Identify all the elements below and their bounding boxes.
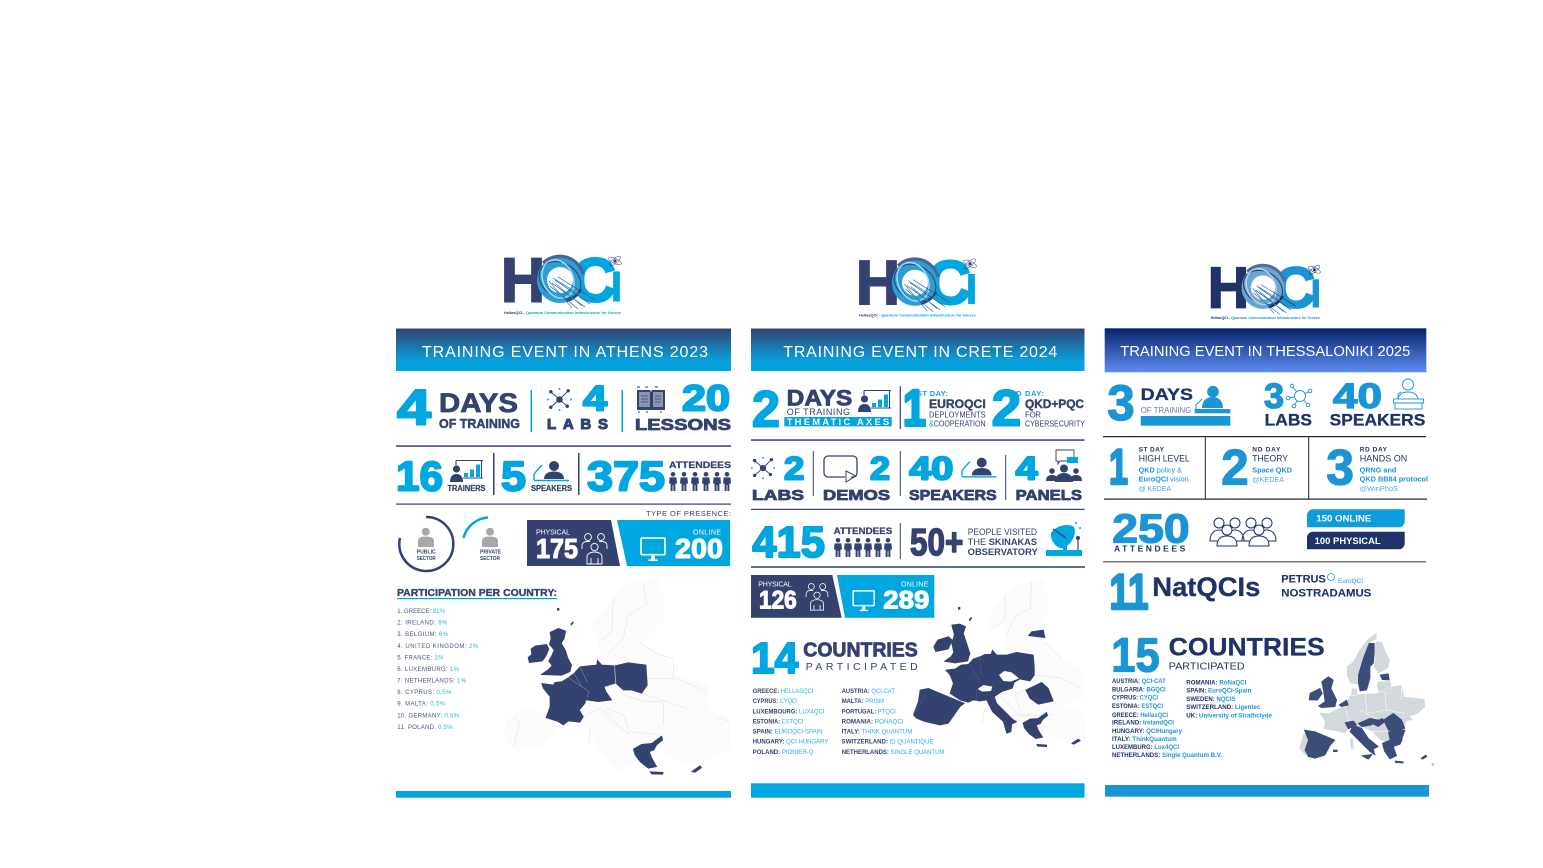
- cell: 1st day: ST DAY: [1139, 447, 1165, 454]
- list: participation by country: 10. GERMANY: 0,5%: [397, 713, 460, 719]
- stat: 4 panels: PANELS: [1016, 488, 1082, 504]
- stat: 2 labs: [751, 450, 804, 504]
- stat: 4 days of training: DAYS: [439, 388, 518, 418]
- stat: 16 trainers: TRAINERS: [448, 484, 486, 493]
- chart: private sector: [463, 517, 517, 571]
- cell: 3rd day: RD DAY: [1360, 447, 1388, 454]
- stat: 2 labs: LABS: [752, 488, 804, 504]
- cell: 1st day: 1: [1109, 439, 1128, 495]
- list: participation by country: 2. IRELAND: 6%: [397, 620, 448, 626]
- box: physical 175: PHYSICAL: [536, 530, 570, 536]
- icon: panel discussion: [1046, 450, 1082, 482]
- list: participating countries, right: MALTA: PRISM: [842, 699, 884, 705]
- stat: 2nd day QKD+PQC: CYBERSECURITY: [1025, 419, 1086, 428]
- stat: 2 days of training: DAYS: [787, 386, 852, 411]
- list: participating countries, right: SWITZERLAND: Ligentec: [1186, 705, 1261, 711]
- cell: 2nd day: [1221, 439, 1292, 495]
- text: Petrus and Nostradamus: PETRUS: [1281, 573, 1326, 585]
- footer bar: [751, 783, 1084, 798]
- list: participation by country: 1. GREECE: 81%: [397, 609, 446, 615]
- list: participating countries, left: GREECE: HellasQCI: [1112, 713, 1168, 719]
- cell: 1st day: QKD policy &: [1139, 467, 1182, 474]
- heading: 14 countries participated: PARTICIPATED: [806, 661, 918, 673]
- stat: 11 NatQCIs: 11: [1110, 564, 1148, 620]
- list: participating countries, left: LUXEMBURG: Lux4QCI: [1112, 745, 1179, 751]
- stat: 40 speakers: [1330, 377, 1425, 430]
- logo: HQCI: C: [927, 249, 971, 318]
- stat: 16 trainers: 16: [396, 452, 443, 500]
- stat: 375 attendees: 375: [587, 452, 665, 500]
- cell: 1st day: HIGH LEVEL: [1139, 454, 1190, 464]
- list: participating countries, left: HUNGARY: QCI HUNGARY: [753, 740, 828, 746]
- list: participating countries, left: [1112, 679, 1222, 759]
- badge: 100 physical: 100 PHYSICAL: [1315, 536, 1381, 546]
- heading: 15 countries participated: PARTICIPATED: [1169, 660, 1245, 672]
- list: participating countries, right: AUSTRIA: QCI-CAT: [842, 689, 895, 695]
- heading: 14 countries participated: [751, 634, 918, 683]
- stat: 50+ visited observatory: [910, 522, 1082, 564]
- list: participating countries, left: HUNGARY: QCIHungary: [1112, 729, 1183, 735]
- list: participating countries, right: NETHERLANDS: SINGLE QUANTUM: [842, 750, 944, 756]
- map: Europe, Crete participants: [913, 580, 1085, 747]
- list: participating countries, left: GREECE: HELLASQCI: [753, 689, 814, 695]
- logo: HQCI: HellasQCI - Quantum Communication Infrastructure for Greece: [504, 311, 621, 315]
- icon: demo screen: [824, 456, 857, 482]
- box: physical 126: [751, 575, 842, 618]
- schedule table lines: [1103, 436, 1427, 500]
- list: participating countries, left: BULGARIA: BGQCI: [1112, 687, 1166, 693]
- list: participation by country: 9. MALTA: 0,5%: [397, 702, 446, 708]
- logo: HQCI: [856, 249, 978, 318]
- stat: 2nd day QKD+PQC: QKD+PQC: [1025, 399, 1084, 411]
- logo: HQCI: HellasQCI - Quantum Communication Infrastructure for Greece: [859, 314, 976, 318]
- logo: HQCI: [501, 246, 623, 316]
- stat: 2 days of training: OF TRAINING: [787, 407, 850, 417]
- stat: 40 speakers: [909, 450, 997, 504]
- stat: 11 NatQCIs: NatQCIs: [1152, 572, 1260, 602]
- list: participating countries, left: IRELAND: IrelandQCI: [1112, 721, 1174, 727]
- stat: 4 panels: [1016, 450, 1082, 504]
- stat: 2 demos: DEMOS: [823, 488, 890, 504]
- heading: 14 countries participated: 14: [751, 634, 799, 683]
- panel: Thessaloniki 2025: [1103, 257, 1434, 797]
- stat: 4 days of training: OF TRAINING: [439, 416, 520, 431]
- stat: 2 demos: [823, 450, 890, 504]
- list: participating countries, left: ITALY: ThinkQuantum: [1112, 737, 1177, 743]
- logo: HQCI: H: [501, 246, 545, 316]
- footer bar: [396, 791, 731, 798]
- cell: 3rd day: HANDS ON: [1360, 454, 1407, 464]
- list: participating countries, right: [1186, 681, 1273, 720]
- stat: 4 labs: LABS: [547, 416, 608, 433]
- stat: 4 days of training: [397, 380, 520, 436]
- cell: 2nd day: @KEDEA: [1252, 477, 1284, 484]
- list: participating countries, right: ITALY: THINK QUANTUM: [842, 730, 912, 736]
- stat: 50+ visited observatory: THE SKINAKAS: [968, 537, 1037, 547]
- stat: 415 attendees: [752, 518, 892, 567]
- text: Petrus and Nostradamus: EuroQCI: [1338, 578, 1363, 585]
- stat: 1st day EuroQCI: EUROQCI: [929, 399, 986, 411]
- badge: 150 online: [1307, 509, 1405, 527]
- list: participating countries, left: [753, 689, 828, 756]
- stat: 3 days of training: DAYS: [1141, 385, 1193, 404]
- logo: HQCI: C: [572, 246, 616, 316]
- list: participating countries, left: NETHERLANDS: Single Quantum B.V.: [1112, 753, 1222, 759]
- stat: 2nd day QKD+PQC: 2: [992, 380, 1021, 436]
- stat: 3 labs: 3: [1264, 377, 1284, 416]
- footer bar: [1105, 785, 1429, 797]
- box: online 289: 289: [883, 586, 929, 614]
- cell: 2nd day: 2: [1221, 439, 1249, 495]
- stat: 1st day EuroQCI: 1: [903, 380, 926, 436]
- logo: HQCI: [1208, 257, 1322, 321]
- stat: 50+ visited observatory: 50+: [910, 522, 963, 564]
- cell: 2nd day: THEORY: [1252, 454, 1288, 464]
- stat: 40 speakers: 40: [1333, 377, 1382, 416]
- banner: title: [396, 328, 731, 371]
- stat: 415 attendees: ATTENDEES: [834, 526, 892, 537]
- box: online 289: ONLINE: [901, 582, 929, 589]
- list: participating countries, right: ROMANIA: RONAQCI: [842, 719, 904, 725]
- stat: 3 labs: [1264, 377, 1312, 430]
- list: participating countries, right: SWEDEN: NQCIS: [1186, 697, 1236, 703]
- stat: 2nd day QKD+PQC: FOR: [1025, 410, 1041, 419]
- list: participating countries, left: LUXEMBOURG: LUX4QCI: [753, 709, 825, 715]
- stat: 40 speakers: SPEAKERS: [1330, 411, 1425, 430]
- chart: private sector: PRIVATE: [480, 550, 502, 556]
- icon: speaker at podium: [1394, 379, 1424, 409]
- logo: HQCI: H: [1208, 257, 1249, 321]
- cell: 3rd day: [1326, 439, 1428, 495]
- list: participation by country: 8. CYPRUS: 0,5%: [397, 690, 452, 696]
- list: participating countries, right: SPAIN: EuroQCI-Spain: [1186, 689, 1252, 695]
- list: participating countries, left: SPAIN: EUROQCI-SPAIN: [753, 730, 823, 736]
- stat: 20 lessons: 20: [682, 378, 730, 418]
- heading: 15 countries participated: COUNTRIES: [1169, 634, 1325, 662]
- list: participating countries, right: ROMANIA: RoNaQCI: [1186, 681, 1247, 687]
- stat: 5 speakers: 5: [501, 452, 526, 500]
- stat: 20 lessons: LESSONS: [635, 417, 731, 434]
- cell: 3rd day: QKD BB84 protocol: [1360, 477, 1428, 484]
- cell: 2nd day: Space QKD: [1252, 467, 1292, 474]
- box: physical 126: 126: [759, 586, 797, 614]
- map: Europe, Thessaloniki participants: [1299, 632, 1427, 763]
- list: participating countries, right: [842, 689, 944, 756]
- stat: 16 trainers: [396, 452, 486, 500]
- list: participating countries, right: UK: University of Strathclyde: [1186, 714, 1273, 720]
- stat: 4 labs: 4: [583, 380, 608, 418]
- list: participating countries, left: CYPRUS: CYQCI: [1112, 696, 1158, 702]
- panel: Athens 2023: [396, 246, 731, 798]
- cell: 3rd day: @WinPhoS: [1360, 486, 1398, 493]
- badge: 150 online: 150 ONLINE: [1316, 514, 1371, 524]
- list: participating countries, right: PORTUGAL: PTQCI: [842, 709, 896, 715]
- list: participation by country: 6. LUXEMBURG: 1%: [397, 667, 460, 673]
- stat: 3 days of training: OF TRAINING: [1141, 406, 1191, 415]
- list: participation by country: 5. FRANCE: 1%: [397, 656, 444, 662]
- logo: HQCI: C: [1274, 257, 1315, 321]
- stat: 50+ visited observatory: PEOPLE VISITED: [968, 527, 1037, 537]
- chart: private sector: SECTOR: [480, 556, 500, 562]
- stat: 250 attendees: 250: [1112, 506, 1190, 552]
- list: participating countries, right: SWITZERLAND: ID QUANTIQUE: [842, 740, 933, 746]
- cell: 1st day: [1109, 439, 1190, 495]
- stat: 2 days of training: [752, 380, 892, 438]
- stat: 250 attendees: ATTENDEES: [1114, 544, 1186, 554]
- logo: HQCI: H: [856, 249, 900, 318]
- box: online 200: ONLINE: [693, 530, 721, 536]
- stat: 3 labs: LABS: [1265, 411, 1312, 430]
- stat: 4 days of training: 4: [397, 380, 431, 436]
- panel: Crete 2024: [751, 249, 1086, 798]
- icon: audience group: [1210, 518, 1276, 546]
- cell: 3rd day: 3: [1326, 439, 1354, 495]
- box: online 200: [617, 520, 730, 566]
- heading: participation per country: PARTICIPATION PER COUNTRY:: [397, 588, 557, 599]
- list: participating countries, left: ESTONIA: ESTQCI: [753, 719, 804, 725]
- stat: 375 attendees: ATTENDEES: [669, 460, 731, 471]
- list: participation by country: 4. UNITED KINGDOM: 2%: [397, 644, 479, 650]
- banner: title: TRAINING EVENT IN CRETE 2024: [783, 344, 1057, 361]
- box: online 289: [837, 575, 934, 618]
- badge: 100 physical: [1307, 532, 1405, 549]
- icon: satellite dish: [1046, 522, 1082, 556]
- logo: HQCI: I: [1310, 271, 1322, 317]
- cell: 2nd day: ND DAY: [1252, 447, 1281, 454]
- list: participating countries, left: ESTONIA: ESTQCI: [1112, 704, 1163, 710]
- stat: 1st day EuroQCI: DEPLOYMENTS: [929, 410, 986, 419]
- text: Petrus and Nostradamus: NOSTRADAMUS: [1281, 588, 1371, 600]
- stat: 5 speakers: [501, 452, 573, 500]
- stat: 1st day EuroQCI: [903, 380, 986, 436]
- stat: 2 labs: 2: [784, 450, 804, 486]
- list: participating countries, left: AUSTRIA: QCI-CAT: [1112, 679, 1166, 685]
- stat: 375 attendees: [587, 452, 731, 500]
- stat: 40 speakers: 40: [909, 450, 953, 486]
- stat: 415 attendees: 415: [752, 518, 825, 567]
- box: physical 126: PHYSICAL: [758, 582, 792, 589]
- stat: 50+ visited observatory: OBSERVATORY: [968, 547, 1038, 557]
- stat: 1st day EuroQCI: &COOPERATION: [929, 419, 986, 428]
- logo: HQCI: I: [610, 262, 623, 312]
- stat: 2 days of training: 2: [752, 380, 780, 438]
- list: participation by country: 7. NETHERLANDS: 1%: [397, 678, 467, 684]
- logo: HQCI: I: [965, 265, 978, 314]
- stat: 4 labs: [547, 380, 608, 433]
- stat: 1st day EuroQCI: ST DAY:: [917, 389, 948, 398]
- page number: 8: [1432, 762, 1434, 767]
- stat: 20 lessons: [635, 378, 731, 434]
- cell: 1st day: EuroQCI vision: [1139, 477, 1189, 484]
- cell: 3rd day: QRNG and: [1360, 467, 1396, 474]
- chart: public sector: SECTOR: [417, 556, 436, 562]
- list: participation by country: 3. BELGIUM: 6%: [397, 632, 449, 638]
- cell: 1st day: @ KEDEA: [1139, 486, 1171, 493]
- stat: 40 speakers: SPEAKERS: [909, 488, 997, 504]
- stat: 4 panels: 4: [1016, 450, 1038, 486]
- stat: 2 days of training: THEMATIC AXES: [787, 417, 889, 428]
- stat: 3 days of training: 3: [1107, 375, 1135, 431]
- heading: 15 countries participated: 15: [1111, 630, 1160, 683]
- map: Europe, Athens participants: [505, 577, 730, 774]
- icon: molecule network: [1286, 384, 1312, 408]
- stat: 2nd day QKD+PQC: [992, 380, 1086, 436]
- list: participating countries, left: CYPRUS: CYQCI: [753, 699, 798, 705]
- list: participation by country: 11. POLAND: 0,5%: [397, 725, 453, 731]
- heading: 15 countries participated: [1111, 630, 1325, 683]
- label: type of presence: TYPE OF PRESENCE:: [646, 509, 731, 518]
- stat: 3 days of training: [1107, 375, 1230, 431]
- stat: 5 speakers: SPEAKERS: [531, 484, 573, 493]
- stat: 11 NatQCIs: [1110, 564, 1260, 620]
- logo: HQCI: HellasQCI - Quantum Communication Infrastructure for Greece: [1211, 316, 1320, 320]
- banner: title: TRAINING EVENT IN THESSALONIKI 2025: [1120, 343, 1410, 360]
- chart: public sector: [399, 517, 453, 571]
- icon: lectern speaker: [1141, 386, 1230, 426]
- banner: title: [751, 328, 1084, 371]
- stat: 2nd day QKD+PQC: ND DAY:: [1010, 389, 1044, 398]
- chart: public sector: PUBLIC: [417, 550, 436, 556]
- box: online 200: 200: [675, 533, 723, 564]
- banner: title: TRAINING EVENT IN ATHENS 2023: [422, 344, 708, 361]
- list: participating countries, left: POLAND: PIONIER-Q: [753, 750, 814, 756]
- box: physical 175: [527, 520, 620, 566]
- banner: title: [1105, 328, 1426, 372]
- heading: 14 countries participated: COUNTRIES: [803, 640, 918, 662]
- box: physical 175: 175: [536, 533, 578, 564]
- stat: 2 demos: 2: [870, 450, 890, 486]
- icon: book: [637, 387, 665, 412]
- text: Petrus and Nostradamus: [1281, 573, 1371, 600]
- list: participation by country: [397, 609, 479, 731]
